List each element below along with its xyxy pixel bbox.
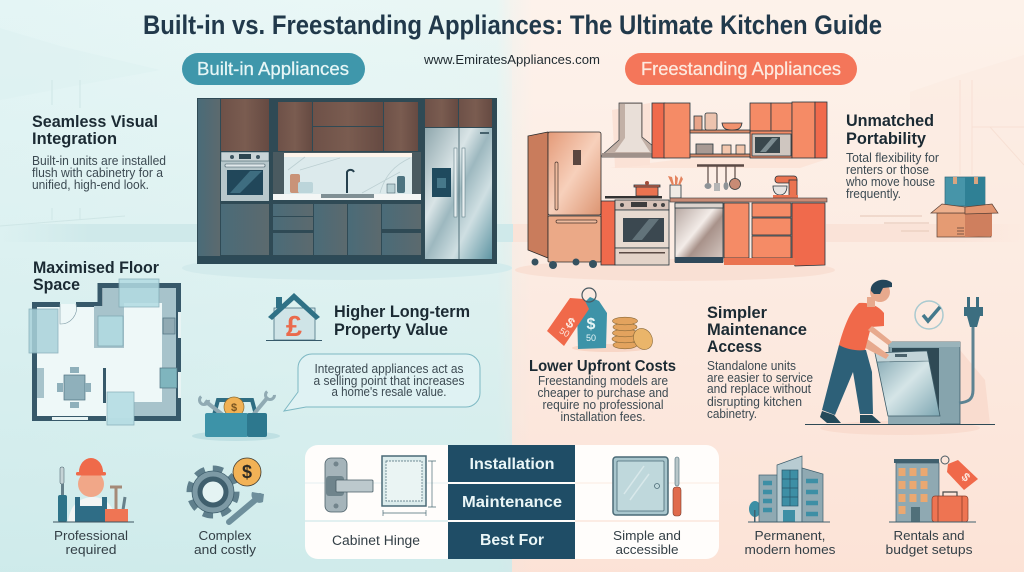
illustration: built-in kitchen [197,98,497,264]
label: rentals and budget setups [886,528,973,557]
callout: resale value: a selling point that increases [314,374,464,388]
text block: unmatched portability: Total flexibility for [846,151,939,165]
text block: unmatched portability: who move house [845,175,935,189]
base cabinets [724,203,825,266]
utensil crock and pot [605,175,683,198]
text block: unmatched portability: frequently. [846,187,901,201]
callout: resale value: Integrated appliances act as [314,362,464,376]
icon: price tags and coins: 50 [586,333,596,343]
icon: price tags and coins: 50 [558,326,571,339]
stove [615,200,669,265]
label: permanent, modern homes [744,528,836,557]
floor plan [29,279,181,425]
pill: built-in appliances: Built-in Appliances [197,59,349,79]
text block: simpler maintenance access: Simpler [707,303,767,322]
text block: maximised floor space heading: Maximised Floor [33,258,159,277]
text block: simpler maintenance access [707,303,813,421]
icon: access panel and screwdriver [613,457,681,516]
callout: resale value: a home's resale value. [332,385,446,399]
pill: freestanding appliances: Freestanding Appliances [641,59,841,79]
icon: price tags and coins [547,288,656,353]
text block: seamless visual integration [32,112,166,192]
text block: simpler maintenance access: Access [707,337,762,356]
text block: simpler maintenance access: Maintenance [707,320,807,339]
label: professional required: required [66,542,116,557]
text block: simpler maintenance access: and replace without [707,382,811,396]
text block: unmatched portability: Unmatched [846,111,934,130]
text block: seamless visual integration: Seamless Visual [32,112,158,131]
icon: toolbox with coin: $ [231,402,237,414]
illustration: freestanding kitchen [528,102,830,269]
dishwasher [675,203,723,263]
text block: simpler maintenance access: cabinetry. [707,407,757,421]
pill: built-in appliances [182,53,365,85]
text block: unmatched portability: Portability [846,129,927,148]
text block: seamless visual integration: flush with cabinetry for a [32,166,163,180]
counter [670,198,827,202]
label: rentals and budget setups: Rentals and [894,528,964,543]
icon: worker [53,458,134,522]
text block: simpler maintenance access: Standalone units [707,359,796,373]
heading: higher long-term property value: Property Value [334,320,448,339]
label: rentals and budget setups: budget setups [886,542,973,557]
text block: unmatched portability: renters or those [846,163,929,177]
pill: freestanding appliances [625,53,857,85]
power plug [959,297,983,403]
icon: moving boxes [860,177,998,237]
icon: price tags and coins: $ [587,316,596,333]
row label: best for: Best For [480,532,544,549]
text block: seamless visual integration: Integration [32,129,117,148]
row label: installation: Installation [470,456,554,473]
cell: simple and accessible [613,528,681,557]
label: professional required: Professional [54,528,128,543]
icon: house with pound sign [266,293,322,343]
text block: unmatched portability [845,111,939,201]
text block: lower upfront costs: cheaper to purchase and [538,386,668,400]
built-in fridge [425,128,492,259]
text block: seamless visual integration: Built-in units are installed [32,154,166,168]
text block: maximised floor space heading: Space [33,275,80,294]
icon: cabinet door dimensions [382,456,436,516]
text block: lower upfront costs [529,358,676,424]
website url: www.EmiratesAppliances.com [423,52,600,67]
text block: seamless visual integration: unified, high-end look. [32,178,149,192]
cell: simple and accessible: Simple and [613,528,681,543]
label: professional required [54,528,128,557]
icon: apartment, suitcase and tag: $ [959,470,973,485]
text block: maximised floor space heading [33,258,159,294]
icon: gear, wrench and dollar bubble: $ [242,462,252,482]
dishwasher unit [875,342,960,424]
text block: simpler maintenance access: disrupting kitchen [707,395,802,409]
person [820,280,892,423]
icon: apartment, suitcase and tag [889,456,978,522]
icon: toolbox with coin [192,390,280,441]
icon: gear, wrench and dollar bubble [190,458,264,522]
check mark [915,301,943,329]
text block: simpler maintenance access: are easier to service [707,371,813,385]
row label: maintenance: Maintenance [462,494,562,511]
cell: cabinet hinge: Cabinet Hinge [332,533,420,548]
icon: house with pound sign: £ [286,311,302,343]
label: permanent, modern homes: Permanent, [754,528,826,543]
icon: cabinet hinge [325,458,373,512]
heading: higher long-term property value [334,302,470,339]
comparison table [305,445,719,559]
text block: lower upfront costs: Lower Upfront Costs [529,358,676,375]
stand mixer [773,176,798,198]
side cabinet [601,201,615,265]
marble backsplash [284,153,412,194]
icon: price tags and coins: $ [563,314,578,332]
label: complex and costly: and costly [194,542,257,557]
label: complex and costly [194,528,257,557]
heading: higher long-term property value: Higher Long-term [334,302,470,321]
range hood [602,103,664,157]
built-in oven [221,152,269,201]
text block: lower upfront costs: Freestanding models are [538,374,668,388]
label: permanent, modern homes: modern homes [744,542,836,557]
text block: lower upfront costs: require no professional [542,398,664,412]
label: complex and costly: Complex [198,528,252,543]
freestanding fridge [528,132,601,269]
title: Built-in vs. Freestanding Appliances: The Ultimate Kitchen Guide [143,10,882,40]
text block: lower upfront costs: installation fees. [560,410,646,424]
illustration: person servicing dishwasher [805,280,995,435]
cell: simple and accessible: accessible [616,542,678,557]
hanging utensils [697,166,744,191]
icon: modern buildings [748,456,830,522]
callout: resale value [284,354,480,411]
upper cabinets [652,102,827,158]
